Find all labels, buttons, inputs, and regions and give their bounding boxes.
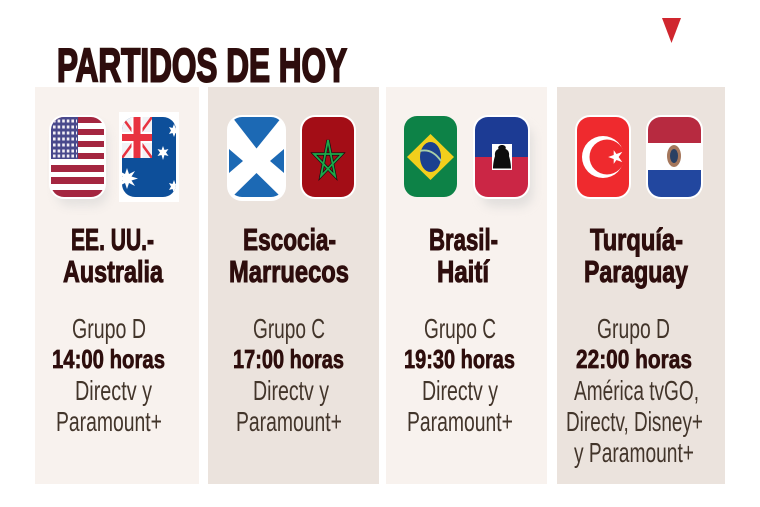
team names — [584, 223, 688, 289]
match details: Directv y — [253, 375, 329, 406]
icon: Scotland flag — [227, 115, 286, 201]
match details — [233, 313, 344, 437]
match details: América tvGO, — [574, 375, 699, 406]
title: PARTIDOS DE HOY — [57, 38, 347, 92]
match details: Grupo C — [253, 313, 325, 344]
match details — [404, 313, 515, 437]
icon: Australia flag — [116, 112, 179, 202]
match details: 22:00 horas — [576, 344, 692, 374]
match details — [52, 313, 165, 437]
match details: Paramount+ — [407, 406, 513, 437]
icon: Paraguay flag — [646, 115, 703, 199]
icon: Brazil flag — [404, 116, 457, 197]
panel: Brasil-Haití — [386, 87, 547, 484]
match details: Grupo D — [597, 313, 670, 344]
team names: Paraguay — [584, 255, 688, 289]
match details: Paramount+ — [236, 406, 342, 437]
team names: Escocia- — [243, 223, 336, 257]
match details — [566, 313, 703, 468]
match details: Grupo C — [424, 313, 496, 344]
match details: Directv y — [75, 375, 152, 406]
match details: Directv y — [422, 375, 498, 406]
match details: Grupo D — [72, 313, 146, 344]
panel: EE. UU.-Australia — [35, 87, 199, 484]
icon: red triangle marker — [662, 18, 681, 43]
team names: Haití — [437, 255, 490, 289]
icon: Morocco flag — [300, 115, 356, 199]
icon: Turkey flag — [575, 115, 631, 199]
match details: 14:00 horas — [52, 344, 165, 374]
team names: Brasil- — [429, 223, 498, 257]
match details: y Paramount+ — [574, 437, 694, 468]
team names — [429, 223, 498, 289]
team names: Australia — [63, 255, 164, 289]
team names: Turquía- — [590, 223, 683, 257]
panel: Escocia-Marruecos — [208, 87, 379, 484]
team names: EE. UU.- — [71, 223, 154, 257]
team names — [63, 223, 164, 289]
icon: United States flag — [49, 115, 108, 206]
panel: Turquía-Paraguay — [557, 87, 725, 484]
team names: Marruecos — [229, 255, 349, 289]
match details: 17:00 horas — [233, 344, 344, 374]
match details: Directv, Disney+ — [566, 406, 703, 437]
icon: Haiti flag — [473, 115, 533, 207]
match details: Paramount+ — [56, 406, 162, 437]
match details: 19:30 horas — [404, 344, 515, 374]
team names — [229, 223, 349, 289]
